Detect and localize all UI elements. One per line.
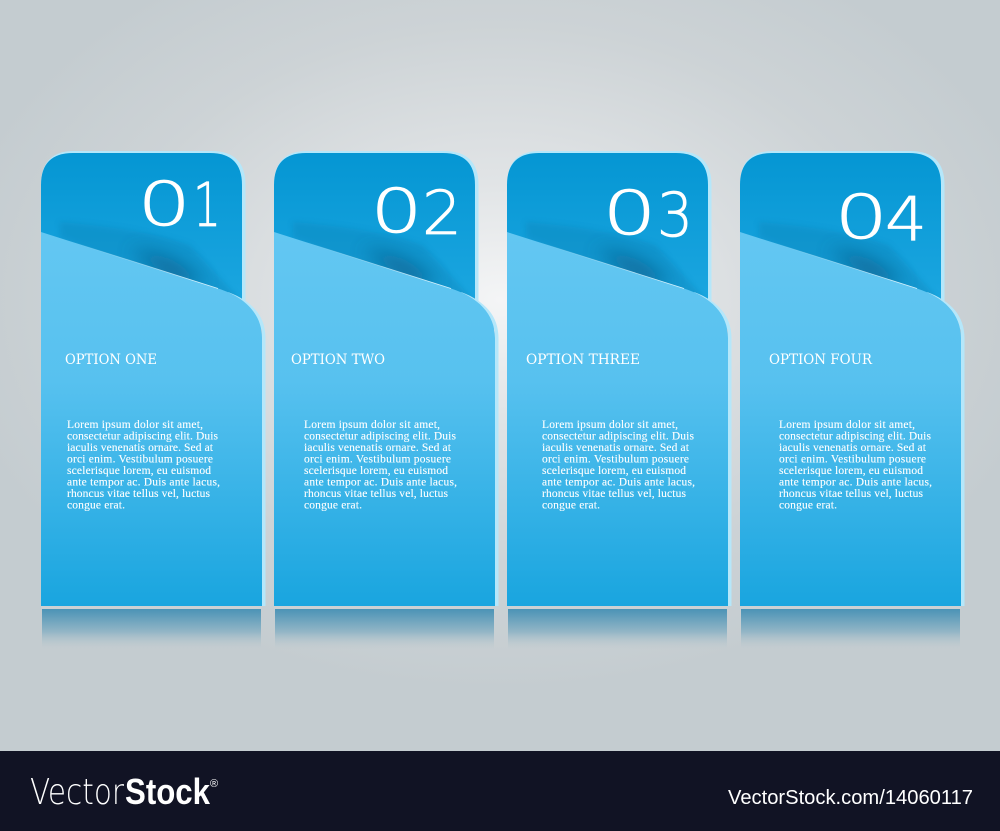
body text: consectetur adipiscing elit. Duis (542, 430, 695, 442)
body text: scelerisque lorem, eu euismod (779, 465, 923, 477)
card 3 (507, 151, 732, 651)
number 02 (370, 176, 462, 249)
body text: scelerisque lorem, eu euismod (67, 465, 211, 477)
body text: ante tempor ac. Duis ante lacus, (779, 476, 932, 488)
body text: consectetur adipiscing elit. Duis (67, 430, 219, 442)
heading: option one: OPTION ONE (65, 352, 157, 368)
card 1 (41, 151, 266, 651)
body text: ante tempor ac. Duis ante lacus, (304, 476, 457, 488)
body text: ante tempor ac. Duis ante lacus, (542, 476, 695, 488)
body text: scelerisque lorem, eu euismod (304, 465, 448, 477)
card 2 (274, 151, 498, 651)
footer logo: Stock (125, 771, 211, 812)
body text: Lorem ipsum dolor sit amet, (304, 419, 440, 431)
body text: iaculis venenatis ornare. Sed at (542, 442, 690, 454)
body text: scelerisque lorem, eu euismod (542, 465, 686, 477)
body text: orci enim. Vestibulum posuere (304, 454, 451, 466)
body text: Lorem ipsum dolor sit amet, (542, 419, 678, 431)
footer logo: ® (210, 778, 218, 790)
body text: Lorem ipsum dolor sit amet, (67, 419, 203, 431)
body text: ante tempor ac. Duis ante lacus, (67, 476, 220, 488)
footer logo: Vector (30, 772, 124, 813)
body text: rhoncus vitae tellus vel, luctus (779, 488, 924, 500)
body text: congue erat. (304, 500, 362, 512)
heading: option two: OPTION TWO (291, 352, 385, 368)
number 01: 1 (193, 170, 221, 241)
footer bar (0, 751, 1000, 831)
body text: iaculis venenatis ornare. Sed at (779, 442, 927, 454)
number 02: 2 (422, 178, 462, 249)
number 01 (138, 169, 221, 241)
footer id: VectorStock.com/14060117 (728, 787, 973, 809)
body text: orci enim. Vestibulum posuere (542, 454, 689, 466)
heading: option three: OPTION THREE (526, 352, 640, 368)
heading: option four: OPTION FOUR (769, 352, 873, 368)
number 03 (602, 178, 693, 251)
card 4 (740, 151, 964, 651)
body text: iaculis venenatis ornare. Sed at (67, 442, 214, 454)
body text: orci enim. Vestibulum posuere (779, 454, 926, 466)
number 01: 0 (138, 169, 191, 240)
body text: iaculis venenatis ornare. Sed at (304, 442, 452, 454)
number 04: 0 (834, 182, 888, 253)
body text: rhoncus vitae tellus vel, luctus (67, 488, 211, 500)
body text: Lorem ipsum dolor sit amet, (779, 419, 915, 431)
number 04: 4 (885, 184, 927, 255)
number 03: 3 (657, 180, 693, 251)
number 02: 0 (370, 176, 422, 247)
body text: orci enim. Vestibulum posuere (67, 454, 213, 466)
number 03: 0 (602, 178, 656, 249)
body text: consectetur adipiscing elit. Duis (304, 430, 457, 442)
body text: congue erat. (779, 500, 837, 512)
body text: rhoncus vitae tellus vel, luctus (542, 488, 687, 500)
number 04 (834, 182, 927, 255)
body text: rhoncus vitae tellus vel, luctus (304, 488, 449, 500)
body text: congue erat. (67, 500, 125, 512)
footer logo (30, 771, 218, 813)
body text: congue erat. (542, 500, 600, 512)
body text: consectetur adipiscing elit. Duis (779, 430, 932, 442)
